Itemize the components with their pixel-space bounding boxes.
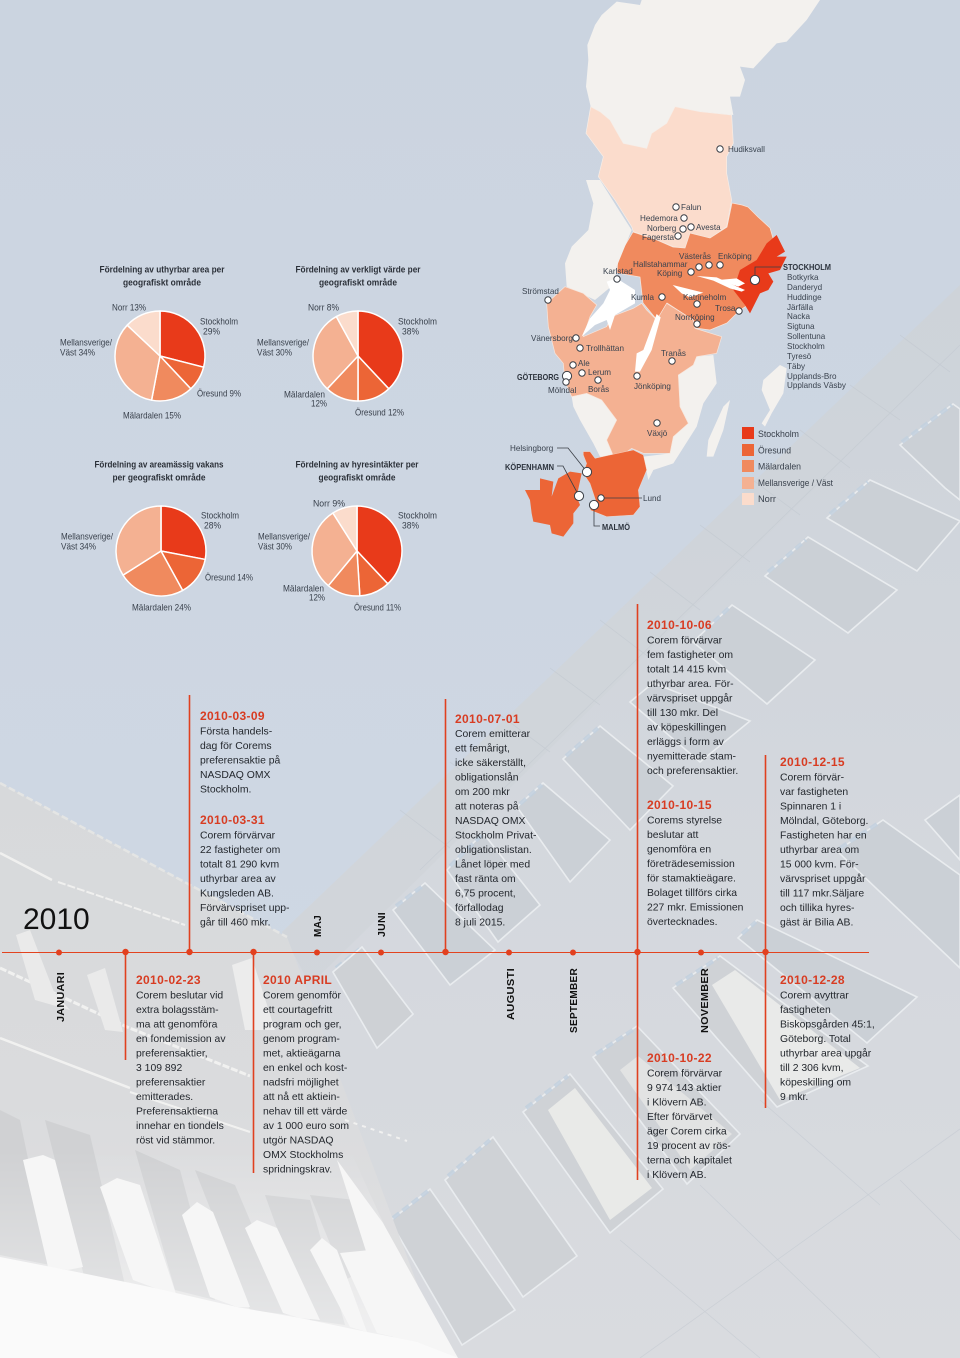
white columns [23, 1155, 447, 1343]
event: 2010-03-31: totalt 81 290 kvm [200, 860, 279, 870]
year heading: 2010 [23, 903, 90, 936]
window H [447, 833, 540, 942]
event: 2010-10-22 [647, 1051, 732, 1181]
event: 2010-03-09: preferensaktie på [200, 754, 281, 766]
map city labels: Hallstahammar [633, 260, 688, 269]
timeline [2, 604, 869, 1180]
heading: Fördelning av uthyrbar area per [100, 264, 225, 276]
map region: Mälardalen [617, 203, 775, 330]
window W6 [925, 795, 960, 860]
event: 2010-03-31: Kungsleden AB. [200, 888, 274, 900]
event: 2010-02-23: emitterades. [136, 1092, 193, 1103]
event: 2010-10-06: fem fastigheter om [647, 650, 733, 661]
event: 2010-12-28: fastigheten [780, 1005, 831, 1016]
month labels [55, 912, 711, 1033]
heading: Fördelning av areamässig vakans [94, 460, 224, 470]
pie chart [115, 311, 205, 401]
map city labels: Karlstad [603, 267, 633, 276]
Småland white [643, 355, 717, 480]
month labels: NOVEMBER [699, 968, 711, 1033]
event: 2010-07-01: 6,75 procent, [455, 888, 516, 900]
event: 2010-10-06 [647, 618, 738, 777]
map of Sweden [505, 0, 847, 537]
event: 2010-10-15: 2010-10-15 [647, 798, 712, 812]
event: 2010-12-28: 9 mkr. [780, 1092, 808, 1103]
event: 2010-10-06: och preferensaktier. [647, 766, 738, 777]
map city labels: Norrköping [675, 313, 715, 322]
map leader lines [557, 267, 781, 526]
event: 2010-12-28: uthyrbar area upgår [780, 1048, 872, 1060]
map city labels: Hudiksvall [728, 145, 765, 154]
map city labels: Strömstad [522, 287, 559, 296]
map city labels: Mölndal [548, 386, 577, 395]
event: 2010-10-15: företrädesemission [647, 859, 735, 870]
map city labels: Västerås [679, 252, 711, 261]
pie labels: 12% [311, 398, 327, 410]
heading: Fördelning av hyresintäkter per [296, 460, 419, 470]
event: 2010-02-23: en fondemission av [136, 1034, 226, 1045]
event: 2010-10-22: Efter förvärvet [647, 1112, 712, 1123]
event: 2010-03-31: Förvärvspriset upp- [200, 903, 290, 914]
pie labels: 38% [402, 520, 419, 532]
event: 2010-12-28: Biskopsgården 45:1, [780, 1018, 875, 1030]
event: 2010-07-01: obligationslån [455, 772, 519, 784]
window D [693, 605, 815, 704]
heading: geografiskt område [319, 278, 397, 288]
pie labels: Väst 34% [61, 542, 96, 552]
event: 2010-03-09: Första handels- [200, 726, 272, 738]
event: 2010-07-01: fast ränta om [455, 874, 516, 885]
event: 2010-12-15 [780, 755, 868, 928]
event: 2010-10-15: för stamaktieägare. [647, 874, 736, 884]
map legend: Norr [758, 494, 776, 505]
map city labels: Lerum [588, 368, 611, 377]
map city labels: Falun [681, 203, 701, 212]
event: 2010-03-31: 22 fastigheter om [200, 845, 280, 856]
map city labels: Danderyd [787, 283, 822, 292]
event: 2010 april: utgör NASDAQ [263, 1136, 333, 1146]
map legend: Öresund [758, 446, 791, 456]
window G [517, 783, 610, 882]
pie labels: Norr 8% [308, 302, 339, 314]
pie labels: Norr 9% [313, 498, 346, 510]
event: 2010-10-06: uthyrbar area. För- [647, 679, 734, 690]
event: 2010-07-01: obligationslistan. [455, 845, 532, 856]
event: 2010-02-23: röst vid stämmor. [136, 1136, 215, 1146]
event: 2010 april: 2010 APRIL [263, 973, 332, 987]
west coast white [572, 393, 617, 458]
pie labels: Mälardalen [284, 390, 325, 400]
event: 2010-10-06: Corem förvärvar [647, 636, 723, 646]
month labels: JANUARI [55, 972, 67, 1022]
map city labels: Sollentuna [787, 332, 826, 341]
window W2 [593, 1026, 740, 1184]
event: 2010-03-09: dag för Corems [200, 741, 272, 752]
pie labels: Mälardalen 15% [123, 410, 181, 422]
event: 2010-07-01: Corem emitterar [455, 729, 531, 740]
pie labels: Väst 34% [60, 348, 95, 358]
pie labels [61, 510, 253, 614]
event: 2010 april: OMX Stockholms [263, 1150, 343, 1161]
event: 2010-03-09 [200, 709, 281, 796]
window W5 [837, 820, 960, 968]
pie labels: Stockholm [398, 316, 437, 328]
map city labels: Upplands Väsby [787, 381, 847, 390]
heading: per geografiskt område [112, 472, 206, 484]
pie labels [257, 302, 437, 418]
pie panel: uthyrbar area [60, 264, 241, 422]
window I [393, 883, 495, 985]
map city labels: Botkyrka [787, 273, 819, 282]
window C [765, 537, 897, 633]
map city labels: Vänersborg [531, 334, 573, 343]
pie labels: Stockholm [398, 510, 437, 522]
map region: Norr pale [586, 107, 733, 248]
event: 2010-12-28: köpeskilling om [780, 1078, 851, 1088]
pie panel: verkligt värde [257, 264, 437, 418]
map city labels: Norberg [647, 224, 676, 233]
pie labels: 29% [203, 326, 220, 338]
pie labels: Öresund 11% [354, 602, 401, 614]
map city labels: Järfälla [787, 303, 814, 312]
Gotland [762, 365, 787, 427]
event: 2010-12-15: 15 000 kvm. För- [780, 860, 859, 870]
event: 2010-10-06: 2010-10-06 [647, 618, 712, 632]
event: 2010-12-15: gäst är Bilia AB. [780, 918, 853, 928]
map city labels: Tyresö [787, 352, 812, 361]
event: 2010 april: nadsfri möjlighet [263, 1078, 339, 1088]
month labels: JUNI [376, 912, 388, 937]
map city labels: Avesta [696, 223, 721, 232]
event: 2010-07-01: 8 juli 2015. [455, 918, 505, 928]
pie labels: Mellansverige/ [61, 532, 113, 542]
event: 2010-02-23: 2010-02-23 [136, 973, 201, 987]
event: 2010-10-06: värvspriset uppgår [647, 692, 733, 704]
map city labels: Fagersta [642, 233, 674, 242]
map city labels: Täby [787, 362, 806, 371]
map city labels: Borås [588, 385, 609, 394]
map city labels: Upplands-Bro [787, 372, 837, 381]
window W3 with shutter [673, 956, 868, 1107]
event: 2010-07-01 [455, 712, 536, 928]
event: 2010-10-15: 227 mkr. Emissionen [647, 902, 744, 914]
window W8 [390, 1189, 515, 1345]
event: 2010-03-09: NASDAQ OMX [200, 770, 271, 781]
map city labels: Tranås [661, 349, 686, 358]
event: 2010-12-15: Corem förvär- [780, 772, 844, 784]
pie labels [60, 302, 241, 422]
map city labels [505, 145, 847, 532]
window F [563, 726, 673, 830]
pie panel: areamässig vakans [61, 460, 253, 614]
pie chart [312, 506, 402, 596]
map city labels: Nacka [787, 312, 810, 321]
lower window recesses [0, 1110, 385, 1325]
event: 2010-12-15: Spinnaren 1 i [780, 802, 841, 812]
event: 2010-12-15: Fastigheten har en [780, 830, 867, 842]
map city labels: Helsingborg [510, 444, 553, 453]
event: 2010-07-01: Stockholm Privat- [455, 830, 536, 842]
event: 2010-10-15: genomföra en [647, 844, 711, 856]
pie labels: Väst 30% [258, 542, 292, 552]
event: 2010 april: av 1 000 euro som [263, 1121, 349, 1132]
event: 2010-10-22: terna och kapitalet [647, 1156, 732, 1166]
timeline axis [2, 952, 869, 954]
background: building right wing [282, 285, 960, 1358]
event: 2010-02-23: Corem beslutar vid [136, 990, 223, 1002]
window A [900, 404, 960, 500]
timeline stems [126, 604, 766, 1180]
map regions: southern Sweden [525, 180, 787, 537]
event: 2010-10-15: övertecknades. [647, 917, 717, 928]
map city labels: Växjö [647, 429, 668, 438]
map city markers [545, 146, 760, 510]
window W7 [445, 1137, 577, 1297]
event: 2010-12-15: Mölndal, Göteborg. [780, 816, 868, 827]
pie chart [116, 506, 206, 596]
event: 2010-03-31: 2010-03-31 [200, 813, 265, 827]
map city labels: Ale [578, 359, 590, 368]
map city labels: Kumla [631, 293, 654, 302]
event: 2010-10-06: av köpeskillingen [647, 722, 726, 734]
pie labels: Mellansverige/ [258, 532, 310, 542]
event: 2010-10-06: totalt 14 415 kvm [647, 664, 726, 676]
event: 2010-12-15: värvspriset uppgår [780, 873, 866, 885]
event: 2010-12-28 [780, 973, 875, 1103]
event: 2010-10-15: Corems styrelse [647, 816, 722, 826]
event: 2010-03-09: Stockholm. [200, 784, 251, 796]
lakes [582, 278, 635, 337]
pie labels: 12% [309, 592, 325, 604]
event: 2010-12-28: till 2 306 kvm, [780, 1063, 844, 1074]
event: 2010-12-15: uthyrbar area om [780, 845, 859, 856]
Skåne [583, 450, 647, 517]
event: 2010-10-22: 2010-10-22 [647, 1051, 712, 1065]
event: 2010-02-23 [136, 973, 226, 1146]
event: 2010-02-23: innehar en tiondels [136, 1121, 224, 1132]
west white strip [565, 180, 632, 300]
event: 2010 april: met, aktieägarna [263, 1048, 341, 1060]
window B [827, 480, 960, 571]
event: 2010-10-15: Bolaget tillförs cirka [647, 888, 737, 899]
event: 2010 april: Corem genomför [263, 990, 342, 1002]
event: 2010-10-22: äger Corem cirka [647, 1126, 727, 1138]
map legend: Mellansverige / Väst [758, 478, 833, 489]
heading: geografiskt område [123, 278, 201, 288]
event: 2010-07-01: förfallodag [455, 903, 504, 914]
map legend: Mälardalen [758, 462, 801, 472]
event: 2010 april [263, 973, 349, 1176]
map city labels: Enköping [718, 252, 752, 261]
event: 2010-03-31: Corem förvärvar [200, 830, 276, 842]
pie labels: Mälardalen [283, 584, 324, 594]
event: 2010 april: program och ger, [263, 1020, 342, 1030]
window W1 with shutter [523, 1074, 663, 1233]
pie labels: Mellansverige/ [60, 338, 112, 348]
map city labels: Huddinge [787, 293, 822, 302]
event: 2010-12-28: Corem avyttrar [780, 990, 849, 1002]
pie labels: Öresund 14% [205, 572, 253, 584]
map city labels: GÖTEBORG [517, 372, 559, 382]
pie panel: hyresintäkter [258, 460, 437, 614]
pie chart [313, 311, 403, 401]
pie labels: Väst 30% [257, 348, 292, 358]
event: 2010-07-01: att noteras på [455, 800, 519, 812]
event: 2010-03-31: uthyrbar area av [200, 874, 276, 885]
event: 2010-12-15: var fastigheten [780, 787, 848, 798]
window W4 [738, 920, 917, 1043]
event: 2010 april: genom program- [263, 1034, 340, 1045]
event: 2010-12-28: Göteborg. Total [780, 1034, 851, 1045]
pie labels: 28% [204, 520, 221, 532]
Stockholm region [733, 235, 787, 313]
window E [630, 683, 750, 762]
event: 2010 april: ett courtagefritt [263, 1005, 332, 1016]
event: 2010-02-23: 3 109 892 [136, 1063, 182, 1074]
heading: Fördelning av verkligt värde per [296, 264, 421, 276]
event: 2010-10-22: Corem förvärvar [647, 1068, 723, 1080]
event: 2010-07-01: NASDAQ OMX [455, 816, 526, 827]
event: 2010-07-01: ett femårigt, [455, 742, 510, 754]
event: 2010-02-23: preferensaktier [136, 1078, 206, 1088]
event: 2010-03-31 [200, 813, 290, 928]
pie labels: Stockholm [200, 316, 238, 328]
timeline dots [56, 949, 769, 956]
map city labels: Trollhättan [586, 344, 624, 353]
event: 2010 april: spridningskrav. [263, 1164, 332, 1176]
map city labels: KÖPENHAMN [505, 462, 554, 472]
pie labels: Mellansverige/ [257, 338, 309, 348]
white wall base [0, 1257, 458, 1358]
month labels: MAJ [312, 915, 324, 937]
pie labels: 38% [402, 326, 419, 338]
map city labels: Hedemora [640, 214, 678, 223]
event: 2010-10-06: nyemitterade stam- [647, 752, 736, 762]
event: 2010-10-06: till 130 mkr. Del [647, 708, 718, 719]
event: 2010-12-15: till 117 mkr.Säljare [780, 888, 864, 900]
map city labels: MALMÖ [602, 522, 631, 532]
event: 2010-12-15: och tillika hyres- [780, 903, 854, 914]
event: 2010-02-23: Preferensaktierna [136, 1106, 218, 1118]
pie labels [258, 498, 437, 614]
map city labels: Lund [643, 494, 661, 503]
event: 2010-10-22: i Klövern AB. [647, 1098, 706, 1108]
pie labels: Öresund 9% [197, 388, 241, 400]
Mellansverige [547, 287, 722, 460]
map legend: Stockholm [758, 429, 799, 440]
Själland [525, 472, 582, 537]
map city labels: Köping [657, 269, 682, 278]
pie labels: Norr 13% [112, 302, 146, 314]
event: 2010-07-01: 2010-07-01 [455, 712, 520, 726]
Öland [707, 400, 730, 457]
map city labels: Stockholm [787, 342, 825, 351]
pie labels: Stockholm [201, 510, 239, 522]
pie labels: Mälardalen 24% [132, 602, 191, 614]
event: 2010-10-22: 19 procent av rös- [647, 1141, 731, 1152]
event: 2010-12-28: 2010-12-28 [780, 973, 845, 987]
background: building left wing [0, 783, 458, 1358]
event: 2010-07-01: Lånet löper med [455, 858, 530, 870]
heading: geografiskt område [318, 472, 396, 484]
event: 2010-07-01: om 200 mkr [455, 787, 510, 798]
month labels: SEPTEMBER [568, 968, 580, 1033]
map city labels: Sigtuna [787, 322, 815, 331]
pie labels: Öresund 12% [355, 408, 404, 418]
event: 2010-03-09: 2010-03-09 [200, 709, 265, 723]
map city labels: STOCKHOLM [783, 263, 831, 272]
event: 2010-10-22: i Klövern AB. [647, 1170, 706, 1181]
event: 2010-02-23: extra bolagsstäm- [136, 1005, 219, 1016]
event: 2010 april: nehav till ett värde [263, 1106, 348, 1118]
event: 2010-12-15: 2010-12-15 [780, 755, 845, 769]
event: 2010-10-06: erläggs i form av [647, 737, 725, 748]
event: 2010 april: en enkel och kost- [263, 1063, 347, 1074]
map city labels: Trosa [715, 304, 736, 313]
event: 2010 april: att nå ett aktiein- [263, 1091, 340, 1103]
event: 2010-10-15 [647, 798, 744, 928]
event: 2010-02-23: preferensaktier, [136, 1048, 208, 1060]
map city labels: Jönköping [634, 382, 671, 391]
map city labels: Katrineholm [683, 293, 726, 302]
event: 2010-03-31: går till 460 mkr. [200, 916, 270, 928]
month labels: AUGUSTI [505, 968, 517, 1020]
map legend [742, 427, 833, 505]
event: 2010-10-22: 9 974 143 aktier [647, 1083, 722, 1094]
window J [333, 947, 413, 1048]
event: 2010-07-01: icke säkerställt, [455, 758, 526, 769]
event: 2010-10-15: beslutar att [647, 830, 699, 841]
event: 2010-02-23: ma att genomföra [136, 1020, 218, 1030]
map region: Norr north [586, 0, 820, 248]
